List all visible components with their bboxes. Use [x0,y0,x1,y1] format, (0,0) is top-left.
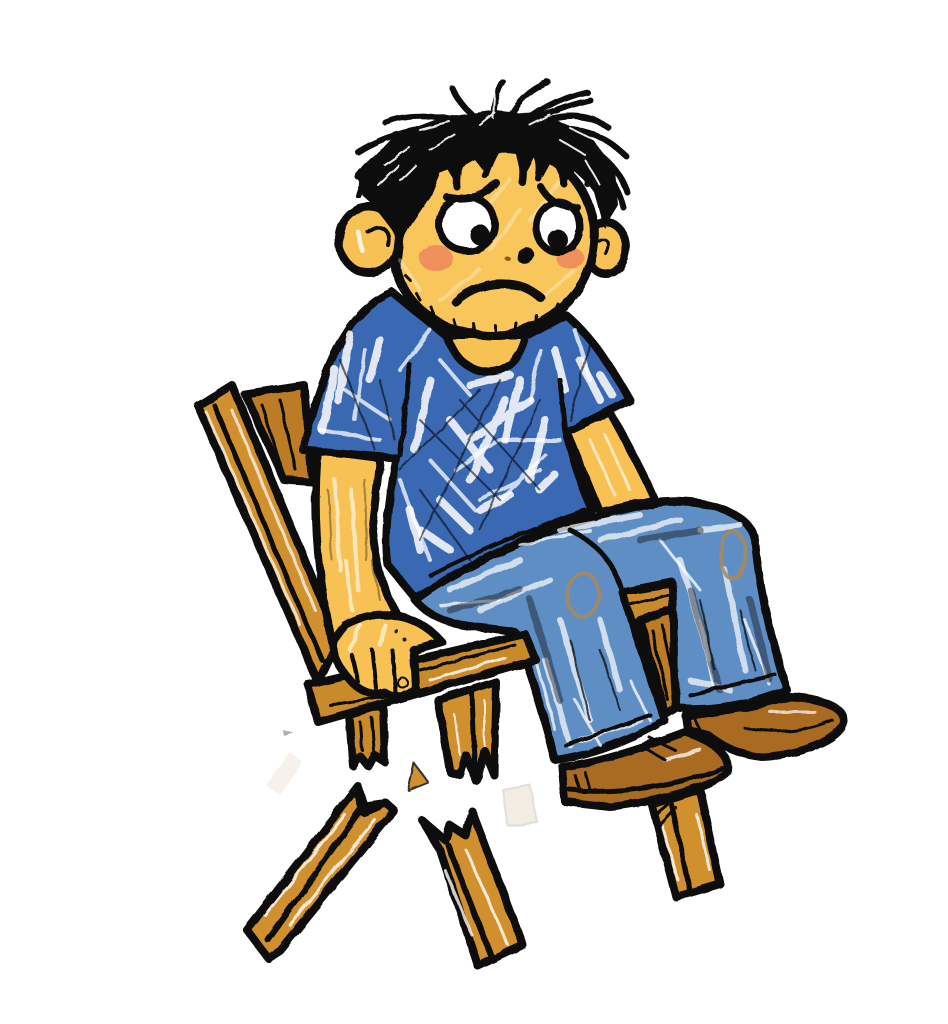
nose [504,245,538,267]
right arm [567,412,655,512]
chair seat, far side [618,583,675,625]
broken leg piece middle [422,811,523,966]
hand gripping seat [333,615,442,697]
blue t-shirt [303,292,630,598]
front shoe [562,732,728,807]
broken leg piece left [247,786,394,958]
illustration: sad boy on a broken chair [194,78,848,970]
figure group [198,82,844,966]
right eye [536,202,580,252]
eyebrows [447,183,577,207]
mouth [456,284,541,302]
face [396,148,594,336]
knee patch stains [567,531,745,617]
chair seat front rail [308,634,536,722]
chair backrest slat [245,385,312,482]
faded splinter right [503,785,537,826]
left eye [439,197,495,251]
chair right rear leg upper [640,608,682,715]
hair [358,82,628,245]
chair right leg lower [652,790,720,897]
right ear [586,222,626,274]
jeans [415,501,787,760]
flying wood chip [408,763,428,790]
left arm [316,450,398,655]
chair broken middle leg stub [438,682,496,782]
left ear [339,207,399,273]
chair broken front leg stub [349,705,385,766]
back shoe [686,697,844,757]
chair back post [198,385,338,682]
faded splinter left [266,730,302,795]
yellow neck [446,335,526,372]
cheeks [419,245,584,271]
head [339,82,628,336]
